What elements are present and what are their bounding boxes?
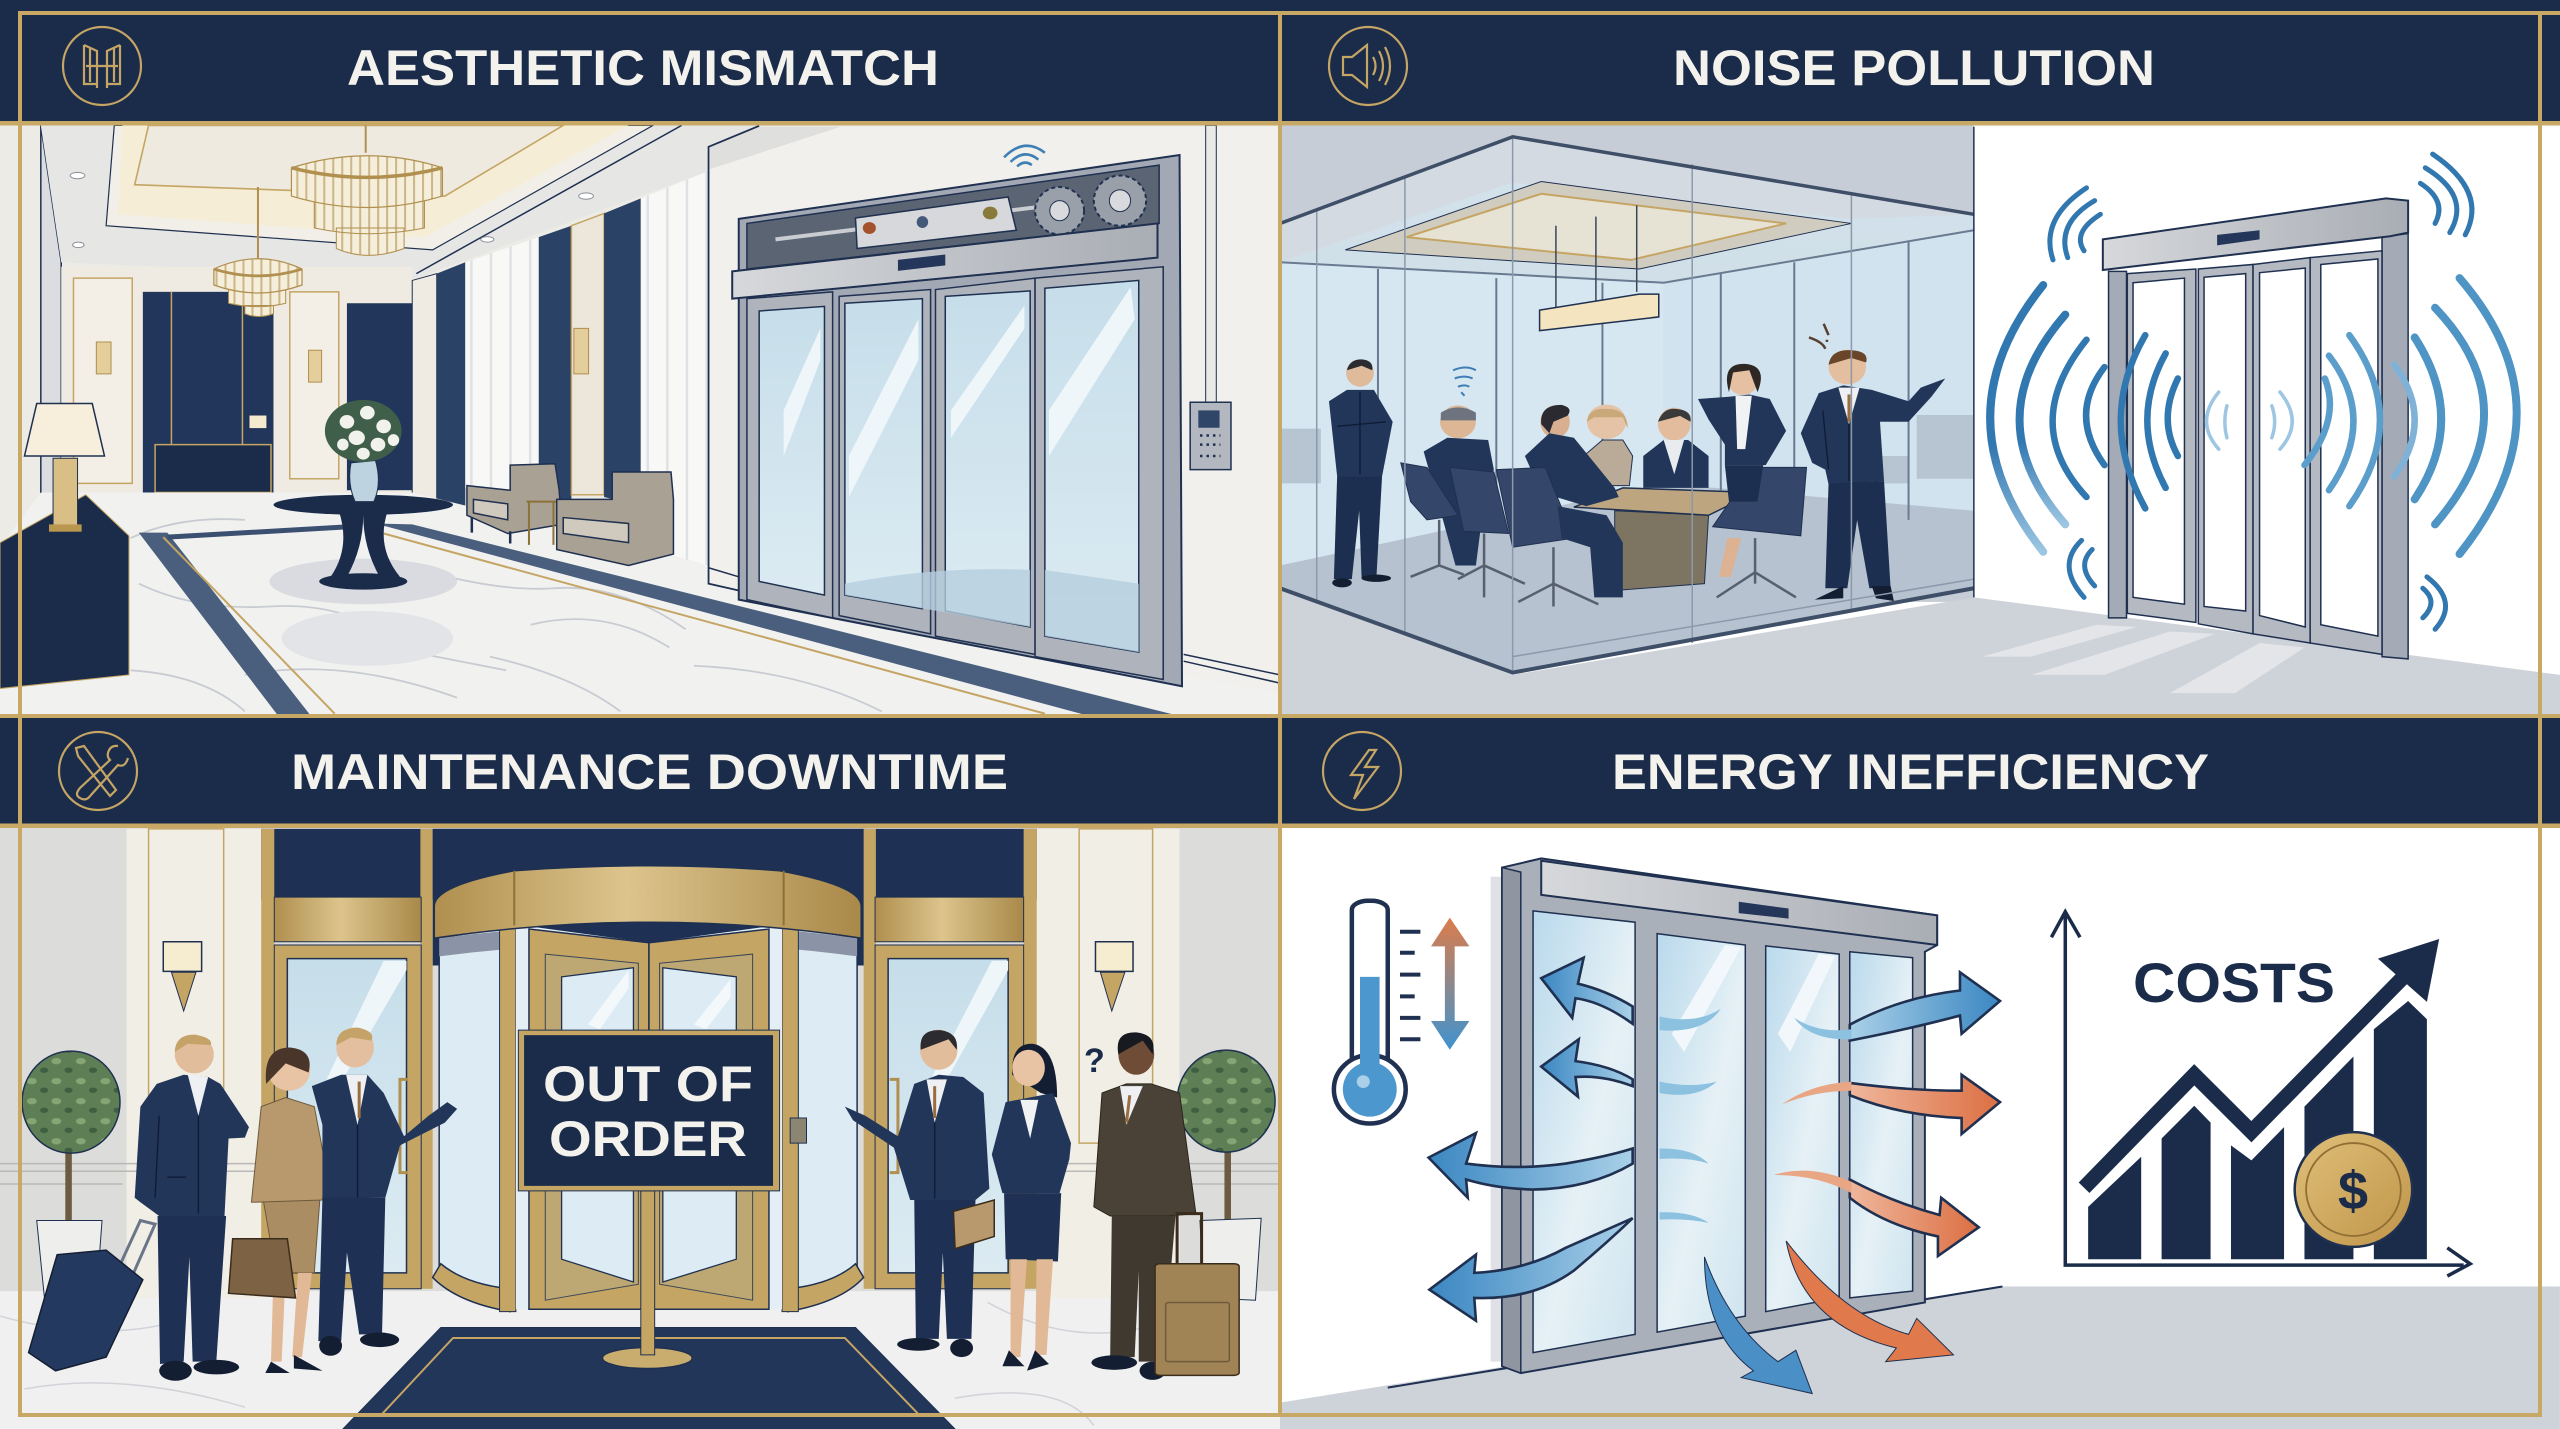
wall panels xyxy=(0,829,1280,1298)
standing man gesturing, annoyed xyxy=(1801,350,1945,601)
rolling suitcase xyxy=(29,1220,155,1371)
annoyance marks xyxy=(1809,324,1829,349)
luggage xyxy=(1155,1214,1239,1375)
air flow arrows: cold air out xyxy=(1429,958,1633,1321)
floor xyxy=(1280,588,2560,715)
air flow arrows: downward xyxy=(1704,1241,1953,1394)
conduit xyxy=(1206,125,1216,404)
chandeliers xyxy=(214,125,442,316)
woman in navy skirt suit xyxy=(992,1044,1071,1371)
icon: lightning bolt xyxy=(1323,732,1401,810)
air flow arrows: right side xyxy=(1850,972,2000,1256)
dollar sign: $ xyxy=(2338,1161,2368,1221)
keypad xyxy=(1190,402,1231,470)
ceiling wedge and wall edge xyxy=(710,127,841,171)
entrance rug xyxy=(343,1328,955,1429)
baseboard xyxy=(709,568,1280,683)
heading: NOISE POLLUTION xyxy=(1673,40,2155,96)
thermometer xyxy=(1334,901,1420,1123)
wall sconces xyxy=(163,942,1133,1011)
coin xyxy=(2295,1132,2412,1247)
panel: noise pollution xyxy=(1280,0,2560,715)
illustration: out of order revolving door with waiting guests xyxy=(0,820,1280,1429)
annoyed signal mark xyxy=(1453,368,1476,396)
sign board xyxy=(518,1030,780,1191)
sign stand xyxy=(602,1191,692,1368)
sign text: OUT OF xyxy=(543,1056,753,1112)
pendant light xyxy=(1540,205,1659,331)
man gesturing to door xyxy=(312,1027,457,1356)
question mark: ? xyxy=(1084,1042,1105,1080)
round table with flowers xyxy=(273,400,453,590)
topiary plants xyxy=(22,1050,1275,1302)
heading: MAINTENANCE DOWNTIME xyxy=(291,744,1008,800)
cost chart xyxy=(2051,912,2470,1276)
header bar xyxy=(0,717,1280,825)
group of guests left xyxy=(29,1027,457,1381)
man in brown suit xyxy=(1091,1032,1239,1380)
panel: aesthetic mismatch xyxy=(0,0,1280,715)
header bar xyxy=(1280,717,2560,825)
icon: speaker xyxy=(1329,27,1407,105)
navy and gold facade xyxy=(261,829,1037,1289)
revolving door drum xyxy=(400,866,898,1312)
marble floor xyxy=(0,492,1280,715)
panel: energy inefficiency xyxy=(1280,717,2560,1429)
ceiling xyxy=(40,126,682,274)
woman in beige suit xyxy=(229,1047,327,1373)
illustration: air leaking through open door xyxy=(1280,824,2560,1429)
meeting table xyxy=(1574,487,1730,590)
automatic door with exposed mechanism xyxy=(732,155,1182,686)
man with folder xyxy=(845,1030,994,1357)
icon: door emblem xyxy=(63,27,141,105)
standing person left xyxy=(1329,359,1393,587)
console with lamp xyxy=(0,404,129,689)
header bar xyxy=(1280,0,2560,122)
standing woman xyxy=(1698,364,1786,577)
wall behind door xyxy=(710,130,832,171)
panel: maintenance downtime xyxy=(0,717,1280,1429)
illustration: boardroom disturbed by door noise xyxy=(1280,119,2560,715)
icon: wifi signal xyxy=(1004,146,1045,166)
wisps of air xyxy=(1660,1009,1851,1223)
seated people and chairs xyxy=(1401,404,1807,606)
sign text: ORDER xyxy=(549,1111,747,1167)
heading: ENERGY INEFFICIENCY xyxy=(1612,744,2209,800)
floor xyxy=(1280,1287,2560,1429)
temperature arrow xyxy=(1431,918,1469,1050)
curtains on the right wall xyxy=(412,171,709,565)
back wall with navy panels xyxy=(61,267,412,495)
automatic sliding door xyxy=(2103,198,2408,659)
icon: wrench and screwdriver xyxy=(59,732,137,810)
glass wall mullions xyxy=(1280,137,1974,673)
armchairs xyxy=(467,464,673,565)
sign text xyxy=(543,1056,753,1167)
sound waves xyxy=(1990,154,2517,629)
floor xyxy=(0,1291,1280,1429)
chart label: COSTS xyxy=(2133,951,2335,1014)
glass meeting room xyxy=(1280,127,1974,673)
heading: AESTHETIC MISMATCH xyxy=(347,40,939,96)
automatic door xyxy=(1491,858,1937,1373)
illustration: luxury lobby with exposed automatic door xyxy=(0,119,1280,715)
header bar xyxy=(0,0,1280,122)
group of guests right xyxy=(845,1030,1239,1380)
man on phone xyxy=(135,1035,249,1381)
floor line xyxy=(1388,1287,2002,1388)
floor light beams xyxy=(1982,625,2304,693)
